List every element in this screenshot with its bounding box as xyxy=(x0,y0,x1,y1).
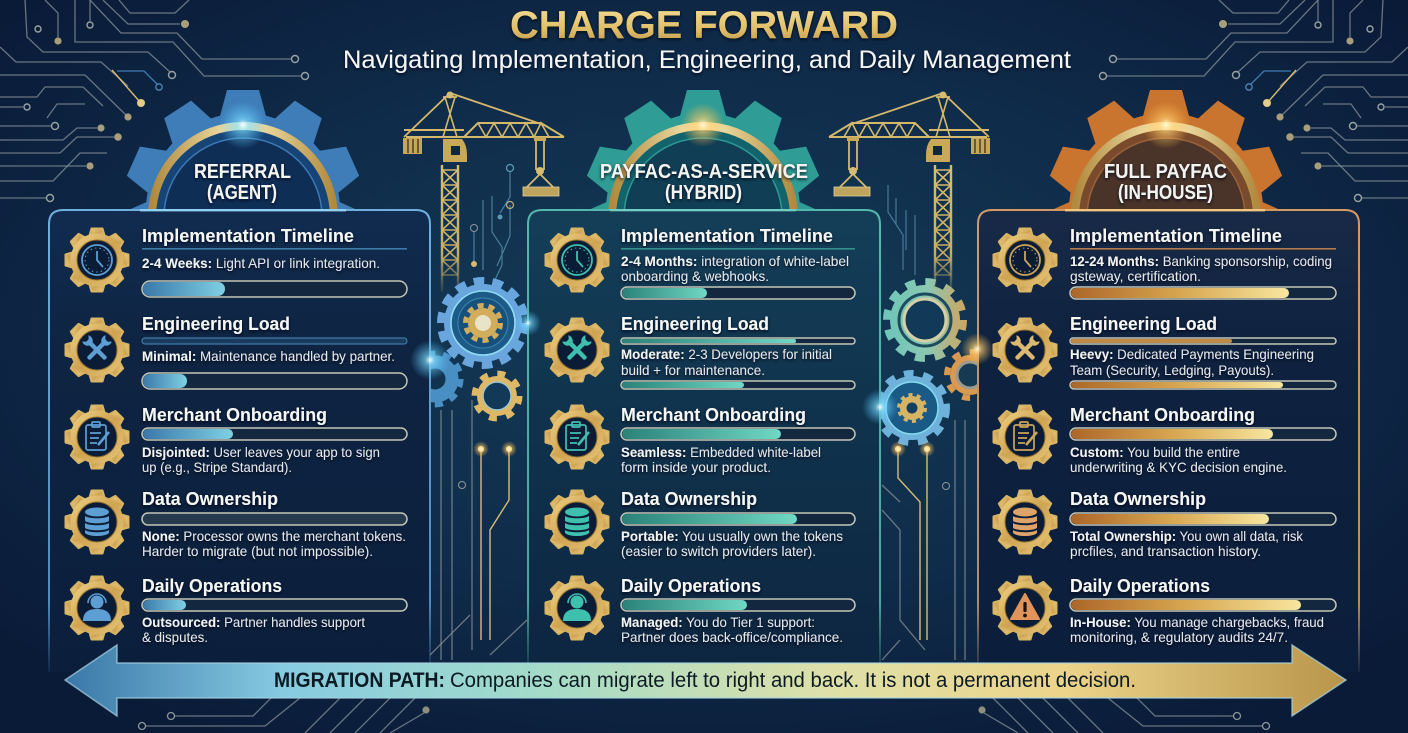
progress bar xyxy=(1070,513,1336,525)
row text: Harder to migrate (but not impossible). xyxy=(142,543,373,559)
icon: clipboard xyxy=(994,406,1056,468)
row text: Merchant Onboarding xyxy=(142,404,327,425)
icon: support agent xyxy=(546,576,608,640)
row text: Managed: You do Tier 1 support: xyxy=(621,614,815,630)
icon: database xyxy=(546,490,608,554)
row text: Data Ownership xyxy=(1070,488,1206,509)
panel frame xyxy=(978,210,1359,672)
circuit traces: right xyxy=(978,0,1408,733)
row: data ownership xyxy=(994,488,1336,559)
panel frame xyxy=(528,210,880,672)
panel title xyxy=(194,161,291,204)
center gears: left cluster xyxy=(410,282,524,418)
progress bar xyxy=(621,599,855,611)
icon: clock xyxy=(546,228,608,292)
icon: warning xyxy=(994,576,1056,640)
row text xyxy=(142,488,406,559)
row: engineering load xyxy=(994,313,1336,389)
row text xyxy=(142,225,380,271)
progress bar xyxy=(142,373,407,389)
row text: Engineering Load xyxy=(1070,313,1217,334)
panel title: PAYFAC-AS-A-SERVICE xyxy=(600,161,808,183)
row text: Data Ownership xyxy=(621,488,757,509)
row text: Engineering Load xyxy=(142,313,290,334)
row text: up (e.g., Stripe Standard). xyxy=(142,459,292,475)
row text: gsteway, certification. xyxy=(1070,268,1201,284)
panel: payfac-as-a-service (hybrid) xyxy=(528,161,880,672)
glow accents xyxy=(140,209,1265,457)
row text: form inside your product. xyxy=(621,459,771,475)
row text: Total Ownership: You own all data, risk xyxy=(1070,528,1304,544)
icon: clock xyxy=(66,228,128,292)
panel title: FULL PAYFAC xyxy=(1104,161,1227,183)
panel title xyxy=(1104,161,1227,204)
progress bar xyxy=(621,381,855,389)
row text: Data Ownership xyxy=(142,488,278,509)
panel frame xyxy=(49,210,430,672)
icon: clipboard xyxy=(66,406,128,468)
row text xyxy=(1070,488,1304,559)
row text: Engineering Load xyxy=(621,313,769,334)
row: data ownership xyxy=(546,488,855,559)
icon: tools xyxy=(66,318,128,382)
row text: Seamless: Embedded white-label xyxy=(621,444,821,460)
row text xyxy=(1070,225,1332,284)
row text: monitoring, & regulatory audits 24/7. xyxy=(1070,629,1288,645)
progress bar xyxy=(1070,428,1336,440)
row text: Portable: You usually own the tokens xyxy=(621,528,843,544)
panel title: (AGENT) xyxy=(207,182,277,204)
row: implementation timeline xyxy=(994,225,1336,299)
progress bar xyxy=(621,513,855,525)
row: engineering load xyxy=(546,313,855,389)
icon: database xyxy=(994,490,1056,554)
row text: Team (Security, Ledging, Payouts). xyxy=(1070,362,1274,378)
row text xyxy=(621,313,832,378)
icon: clipboard xyxy=(546,406,608,468)
progress bar xyxy=(142,513,407,525)
row text: 12-24 Months: Banking sponsorship, coding xyxy=(1070,253,1332,269)
gear: orange xyxy=(947,352,993,398)
row text: Daily Operations xyxy=(621,575,761,596)
row text xyxy=(1070,313,1314,378)
subtitle: Navigating Implementation, Engineering, and Daily Management xyxy=(343,46,1071,74)
arrow shape xyxy=(65,645,1346,716)
row: daily operations xyxy=(994,575,1336,645)
row text xyxy=(1070,575,1324,645)
progress bar xyxy=(142,428,407,440)
row text: Implementation Timeline xyxy=(621,225,833,246)
row text xyxy=(142,313,395,364)
effort meter xyxy=(1070,338,1336,344)
progress bar xyxy=(142,599,407,611)
progress bar xyxy=(1070,287,1336,299)
progress bar xyxy=(142,281,407,297)
row: daily operations xyxy=(546,575,855,645)
row text: Outsourced: Partner handles support xyxy=(142,614,365,630)
row text: 2-4 Months: integration of white-label xyxy=(621,253,849,269)
row text: Implementation Timeline xyxy=(142,225,354,246)
row text: underwriting & KYC decision engine. xyxy=(1070,459,1287,475)
gear: blue with gold core xyxy=(878,374,946,442)
header gear: payfac-as-a-service xyxy=(581,90,825,308)
row: merchant onboarding xyxy=(546,404,855,475)
arrow label: MIGRATION PATH: xyxy=(274,669,445,692)
panel title: REFERRAL xyxy=(194,161,291,183)
row text xyxy=(1070,404,1287,475)
circuit traces: left xyxy=(0,0,430,733)
progress bar xyxy=(621,287,855,299)
icon: database xyxy=(66,490,128,554)
row text: onboarding & webhooks. xyxy=(621,268,769,284)
row text xyxy=(621,404,821,475)
gear: small blue xyxy=(410,354,460,404)
icon: tools xyxy=(994,318,1056,382)
row text: Merchant Onboarding xyxy=(621,404,806,425)
row: merchant onboarding xyxy=(994,404,1336,475)
row: data ownership xyxy=(66,488,407,559)
panel title xyxy=(600,161,808,204)
crane: right xyxy=(829,92,990,292)
header gear: referral xyxy=(121,90,365,308)
icon: tools xyxy=(546,318,608,382)
panel title: (IN-HOUSE) xyxy=(1118,182,1213,204)
row text xyxy=(142,575,365,645)
row: engineering load xyxy=(66,313,407,389)
row text: Heevy: Dedicated Payments Engineering xyxy=(1070,346,1314,362)
row text: In-House: You manage chargebacks, fraud xyxy=(1070,614,1324,630)
migration path arrow xyxy=(65,645,1346,716)
row text xyxy=(142,404,380,475)
progress bar xyxy=(1070,381,1336,389)
title: CHARGE FORWARD xyxy=(510,4,898,47)
row: merchant onboarding xyxy=(66,404,407,475)
progress bar xyxy=(621,428,855,440)
center gears: right cluster xyxy=(878,282,993,442)
panel: full payfac (in-house) xyxy=(978,161,1359,672)
row text: Merchant Onboarding xyxy=(1070,404,1255,425)
icon: support agent xyxy=(66,576,128,640)
row text: Disjointed: User leaves your app to sign xyxy=(142,444,380,460)
gear: teal xyxy=(887,282,963,358)
row text: build + for maintenance. xyxy=(621,362,765,378)
circuit traces: central gaps xyxy=(430,164,965,660)
row text: Daily Operations xyxy=(1070,575,1210,596)
gear: small gold xyxy=(474,374,520,418)
header gear: full payfac xyxy=(1044,90,1288,308)
row text xyxy=(621,575,843,645)
panel title: (HYBRID) xyxy=(665,182,742,204)
row: implementation timeline xyxy=(66,225,407,297)
row text: 2-4 Weeks: Light API or link integration. xyxy=(142,255,380,271)
row text: Implementation Timeline xyxy=(1070,225,1282,246)
panel: referral (agent) xyxy=(49,161,430,672)
row text: prcfiles, and transaction history. xyxy=(1070,543,1261,559)
crane: left xyxy=(403,92,564,292)
row text: Moderate: 2-3 Developers for initial xyxy=(621,346,832,362)
row: implementation timeline xyxy=(546,225,855,299)
row text: & disputes. xyxy=(142,629,208,645)
row text: Minimal: Maintenance handled by partner. xyxy=(142,348,395,364)
arrow message: Companies can migrate left to right and back. It is not a permanent decision. xyxy=(450,669,1136,692)
row text: (easier to switch providers later). xyxy=(621,543,816,559)
effort meter xyxy=(621,338,855,344)
row text: Daily Operations xyxy=(142,575,282,596)
gear: large blue xyxy=(442,282,524,364)
progress bar xyxy=(1070,599,1336,611)
row text: None: Processor owns the merchant tokens. xyxy=(142,528,406,544)
row text xyxy=(621,488,843,559)
row text: Custom: You build the entire xyxy=(1070,444,1240,460)
row text xyxy=(621,225,849,284)
row text: Partner does back-office/compliance. xyxy=(621,629,843,645)
icon: clock xyxy=(994,228,1056,292)
row: daily operations xyxy=(66,575,407,645)
